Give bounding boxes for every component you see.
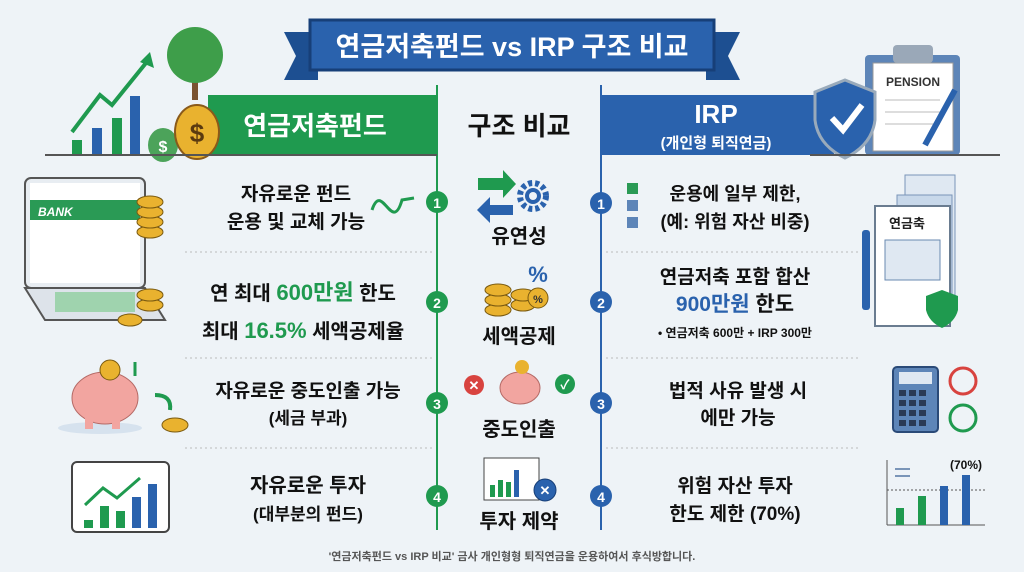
row 4 right text: 한도 제한 (70%)	[669, 503, 801, 525]
row 3 right text: 에만 가능	[700, 407, 776, 429]
center icon: coins percent	[482, 262, 556, 348]
row 1 right text: 운용에 일부 제한,	[670, 184, 800, 204]
title banner: 연금저축펀드 vs IRP 구조 비교	[336, 32, 688, 62]
row 1 left: bank laptop icon	[25, 178, 165, 326]
center icon: chart with x	[479, 458, 559, 533]
icon: pension clipboard and shield: PENSION	[886, 75, 940, 89]
row 1 left text	[227, 183, 414, 233]
row dividers	[185, 252, 860, 448]
row 3 left text	[215, 380, 401, 428]
row 4 right icon: bar chart 70%: (70%)	[950, 458, 982, 472]
badge 2 blue: 2	[597, 295, 605, 311]
badge 4 blue: 4	[597, 489, 605, 505]
row 2 left text	[202, 280, 404, 343]
footer note: '연금저축펀드 vs IRP 비교' 금사 개인형형 퇴직연금을 운용하여서 후식방합니다.	[329, 549, 695, 563]
badge 1 green	[426, 191, 448, 213]
center icon: piggy with x and check: ✕	[469, 378, 479, 393]
center icon: chart with x: 투자 제약	[479, 510, 559, 533]
badge 3 blue	[590, 392, 612, 414]
row 1-2 right icon: documents: 연금축	[889, 216, 925, 231]
center divider lines	[437, 85, 601, 530]
row 4 right text: 위험 자산 투자	[677, 475, 793, 497]
badge 3 green	[426, 392, 448, 414]
badge 1 blue	[590, 192, 612, 214]
row 3 right text	[669, 380, 807, 429]
header: 연금저축펀드	[208, 95, 437, 155]
badge 4 green	[426, 485, 448, 507]
row 2 right text	[658, 266, 812, 340]
header: IRP: (개인형 퇴직연금)	[661, 135, 771, 152]
row 3 right text: 법적 사유 발생 시	[669, 380, 807, 402]
center icon: piggy with x and check	[464, 360, 575, 441]
row 1 left text: 운용 및 교체 가능	[227, 211, 365, 233]
row 1 left text: 자유로운 펀드	[241, 183, 351, 205]
row 3 right icon: calculator	[893, 367, 976, 432]
title banner	[284, 20, 740, 80]
badge 1 green: 1	[433, 195, 441, 211]
center icon: piggy with x and check: 중도인출	[482, 418, 556, 441]
icon: pension clipboard and shield	[810, 45, 1000, 158]
row 1 right text	[627, 183, 809, 232]
icon: growth tree and money bags	[45, 27, 437, 162]
row 1 right text: (예: 위험 자산 비중)	[661, 212, 809, 232]
row 4 left text: (대부분의 펀드)	[253, 505, 363, 524]
row 2 right text: • 연금저축 600만 + IRP 300만	[658, 325, 812, 340]
icon: growth tree and money bags: $	[190, 118, 205, 148]
badge 2 green	[426, 291, 448, 313]
badge 3 green: 3	[433, 396, 441, 412]
center icon: piggy with x and check: ✓	[560, 377, 570, 392]
badge 1 blue: 1	[597, 196, 605, 212]
header: IRP	[602, 95, 834, 155]
center icon: coins percent: %	[533, 294, 543, 306]
row 1-2 right icon: documents	[862, 175, 958, 328]
badge 4 blue	[590, 485, 612, 507]
center icon: arrows and gear	[477, 170, 547, 248]
row 2 right text: 900만원 한도	[676, 293, 794, 316]
row 4 left text: 자유로운 투자	[250, 474, 366, 497]
row 4 left: chart icon	[72, 462, 169, 532]
row 4 left text	[250, 474, 366, 524]
header: 구조 비교: 구조 비교	[468, 111, 570, 141]
center icon: chart with x: ✕	[540, 483, 550, 498]
badge 2 blue	[590, 291, 612, 313]
row 2 right text: 연금저축 포함 합산	[660, 266, 810, 288]
row 3 left text: 자유로운 중도인출 가능	[215, 380, 401, 402]
icon: growth tree and money bags: $	[159, 139, 168, 156]
row 3 left: piggy bank	[58, 360, 188, 434]
row 2 left text: 연 최대 600만원 한도	[210, 280, 396, 305]
header: IRP: IRP	[694, 99, 738, 129]
row 3 left text: (세금 부과)	[269, 409, 347, 428]
center icon: coins percent: 세액공제	[482, 325, 556, 348]
badge 2 green: 2	[433, 295, 441, 311]
row 4 right text	[669, 475, 801, 525]
header: 연금저축펀드: 연금저축펀드	[243, 111, 387, 141]
row 4 right icon: bar chart 70%	[887, 458, 985, 525]
row 1 left: bank laptop icon: BANK	[38, 205, 74, 219]
center icon: arrows and gear: 유연성	[491, 225, 547, 248]
row 2 left text: 최대 16.5% 세액공제율	[202, 318, 404, 343]
badge 4 green: 4	[433, 489, 441, 505]
center icon: coins percent: %	[528, 262, 548, 287]
badge 3 blue: 3	[597, 396, 605, 412]
